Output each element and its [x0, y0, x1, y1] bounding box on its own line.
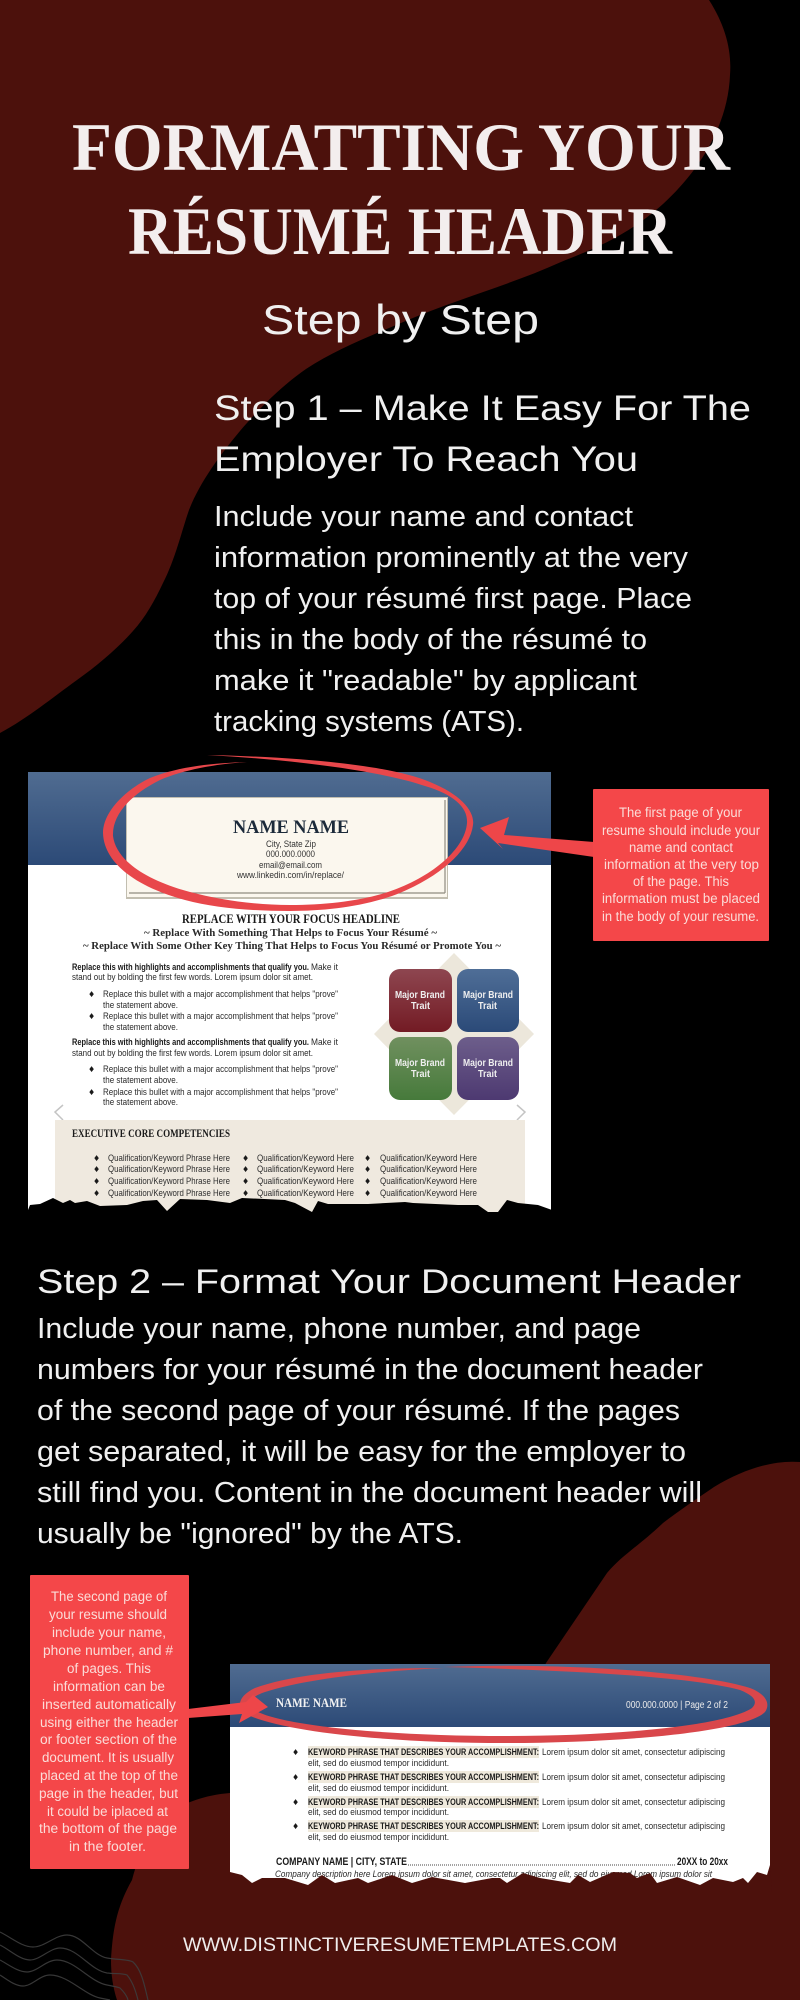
resume page 2 image: [228, 1664, 772, 1892]
blue header band: [28, 772, 551, 865]
core competencies panel: Qualification/Keyword Here: [257, 1164, 354, 1175]
core competencies panel: ♦: [93, 1165, 100, 1174]
core competencies panel: Qualification/Keyword Here: [380, 1164, 477, 1175]
core competencies panel: ♦: [242, 1189, 249, 1198]
page background: [230, 1664, 770, 1889]
torn paper edge: [228, 1865, 772, 1892]
callout 1: The first page of your: [619, 805, 742, 820]
step 2 body text: of the second page of your résumé. If the pages: [37, 1395, 680, 1427]
accomplishment bullets: KEYWORD PHRASE THAT DESCRIBES YOUR ACCOMPLISHMENT:: [308, 1797, 539, 1808]
callout 2: your resume should: [49, 1607, 167, 1622]
step 2 body text: get separated, it will be easy for the employer to: [37, 1436, 686, 1468]
subtitle: Step by Step: [262, 296, 539, 343]
step 1 heading: [214, 389, 751, 479]
accomplishment bullets: Lorem ipsum dolor sit amet, consectetur adipiscing: [542, 1747, 725, 1758]
step 1 body text: Include your name and contact: [214, 501, 633, 533]
name box: [126, 797, 448, 899]
core competencies panel: ♦: [93, 1189, 100, 1198]
accomplishment bullets: ♦: [292, 1798, 299, 1807]
highlights text: ♦: [88, 990, 95, 999]
callout 2: in the footer.: [69, 1839, 146, 1854]
step 1 heading: Employer To Reach You: [214, 440, 638, 479]
callout 2: include your name,: [52, 1625, 166, 1640]
callout 1: resume should include your: [602, 823, 760, 838]
accomplishment bullets: KEYWORD PHRASE THAT DESCRIBES YOUR ACCOMPLISHMENT:: [308, 1821, 539, 1832]
name box: www.linkedin.com/in/replace/: [236, 870, 344, 880]
accomplishment bullets: [292, 1746, 725, 1843]
callout 2: the bottom of the page: [39, 1821, 177, 1836]
top dark red shape: [0, 0, 730, 733]
accomplishment bullets: elit, sed do eiusmod tempor incididunt.: [308, 1758, 449, 1769]
title: FORMATTING YOUR: [72, 109, 731, 185]
core competencies panel: ♦: [364, 1177, 371, 1186]
brand trait diagram: [374, 953, 534, 1115]
focus headline: ~ Replace With Some Other Key Thing That Helps to Focus You Résumé or Promote You ~: [83, 940, 501, 952]
callout arrow 2: [188, 1695, 268, 1723]
focus headline: [83, 911, 501, 952]
highlights text: Replace this bullet with a major accomplishment that helps "prove": [103, 1087, 338, 1098]
core competencies panel: Qualification/Keyword Here: [257, 1176, 354, 1187]
decorative wavy lines: [0, 1932, 148, 2000]
step 1 body text: tracking systems (ATS).: [214, 706, 524, 738]
red ellipse highlighting name: [103, 755, 473, 911]
highlights text: the statement above.: [103, 1097, 178, 1108]
carousel chevrons: [55, 1105, 525, 1120]
highlights text: the statement above.: [103, 1075, 178, 1086]
core competencies panel: ♦: [93, 1177, 100, 1186]
callout 1: information at the very top: [604, 857, 759, 872]
callout 2: of pages. This: [67, 1661, 151, 1676]
callout 2: information can be: [53, 1679, 165, 1694]
header text: NAME NAME: [276, 1696, 347, 1710]
core competencies panel: ♦: [364, 1165, 371, 1174]
highlights text: the statement above.: [103, 1000, 178, 1011]
highlights text: Replace this bullet with a major accomplishment that helps "prove": [103, 1064, 338, 1075]
brand trait diagram: Trait: [478, 1000, 497, 1012]
core competencies panel: ♦: [242, 1154, 249, 1163]
callout 2: using either the header: [40, 1715, 178, 1730]
core competencies panel: Qualification/Keyword Here: [380, 1176, 477, 1187]
step 2 body text: usually be "ignored" by the ATS.: [37, 1518, 463, 1550]
core competencies panel: Qualification/Keyword Here: [380, 1153, 477, 1164]
step 2 body text: numbers for your résumé in the document header: [37, 1354, 703, 1386]
focus headline: REPLACE WITH YOUR FOCUS HEADLINE: [182, 911, 400, 926]
highlights text: Make it: [311, 1037, 338, 1048]
callout 2: phone number, and #: [43, 1643, 173, 1658]
brand trait diagram: Trait: [478, 1068, 497, 1080]
blue header band: [230, 1664, 770, 1727]
torn paper edge: [26, 1198, 553, 1220]
name box: City, State Zip: [266, 839, 316, 849]
title: RÉSUMÉ HEADER: [128, 193, 673, 269]
accomplishment bullets: Lorem ipsum dolor sit amet, consectetur adipiscing: [542, 1821, 725, 1832]
brand trait diagram: Trait: [411, 1068, 430, 1080]
accomplishment bullets: ♦: [292, 1748, 299, 1757]
core competencies panel: Qualification/Keyword Phrase Here: [108, 1188, 230, 1199]
highlights text: stand out by bolding the first few words. Lorem ipsum dolor sit amet.: [72, 1048, 313, 1059]
core competencies panel: EXECUTIVE CORE COMPETENCIES: [72, 1128, 230, 1140]
accomplishment bullets: KEYWORD PHRASE THAT DESCRIBES YOUR ACCOMPLISHMENT:: [308, 1747, 539, 1758]
callout 1: name and contact: [629, 840, 733, 855]
accomplishment bullets: KEYWORD PHRASE THAT DESCRIBES YOUR ACCOMPLISHMENT:: [308, 1772, 539, 1783]
core competencies panel: Qualification/Keyword Here: [380, 1188, 477, 1199]
focus headline: ~ Replace With Something That Helps to Focus Your Résumé ~: [144, 927, 437, 939]
core competencies panel: Qualification/Keyword Phrase Here: [108, 1153, 230, 1164]
accomplishment bullets: Lorem ipsum dolor sit amet, consectetur adipiscing: [542, 1797, 725, 1808]
core competencies panel: ♦: [364, 1154, 371, 1163]
step 1 body text: top of your résumé first page. Place: [214, 583, 692, 615]
accomplishment bullets: elit, sed do eiusmod tempor incididunt.: [308, 1783, 449, 1794]
brand trait diagram: Trait: [411, 1000, 430, 1012]
step 1 body text: information prominently at the very: [214, 542, 689, 574]
step 2 heading: Step 2 – Format Your Document Header: [37, 1263, 741, 1301]
callout 1: of the page. This: [633, 874, 729, 889]
core competencies panel: Qualification/Keyword Here: [257, 1188, 354, 1199]
callout arrow 1: [480, 817, 594, 857]
callout 1: in the body of your resume.: [602, 909, 759, 924]
callout 2: The second page of: [51, 1589, 167, 1604]
highlights text: Replace this bullet with a major accomplishment that helps "prove": [103, 1011, 338, 1022]
highlights text: Replace this with highlights and accomplishments that qualify you.: [72, 962, 309, 973]
step 1 body text: this in the body of the résumé to: [214, 624, 647, 656]
brand trait diagram: Major Brand: [463, 1057, 513, 1069]
core competencies panel: Qualification/Keyword Phrase Here: [108, 1176, 230, 1187]
brand trait diagram: Major Brand: [395, 989, 445, 1001]
step 1 body text: make it "readable" by applicant: [214, 665, 637, 697]
step 1 body text: [214, 501, 692, 738]
header text: 000.000.0000 | Page 2 of 2: [626, 1700, 728, 1711]
name box: 000.000.0000: [266, 849, 315, 859]
step 2 body text: [37, 1313, 703, 1550]
highlights text: Make it: [311, 962, 338, 973]
accomplishment bullets: ♦: [292, 1822, 299, 1831]
callout 2: [30, 1575, 189, 1869]
step 2 body text: still find you. Content in the document header will: [37, 1477, 702, 1509]
name box: NAME NAME: [233, 817, 349, 838]
callout 2: document. It is usually: [42, 1750, 174, 1765]
title: [72, 109, 731, 269]
red ellipse highlighting header: [240, 1666, 767, 1743]
accomplishment bullets: elit, sed do eiusmod tempor incididunt.: [308, 1807, 449, 1818]
core competencies panel: Qualification/Keyword Phrase Here: [108, 1164, 230, 1175]
brand trait diagram: Major Brand: [463, 989, 513, 1001]
accomplishment bullets: ♦: [292, 1773, 299, 1782]
step 2 body text: Include your name, phone number, and page: [37, 1313, 641, 1345]
callout 2: it could be iplaced at: [47, 1804, 168, 1819]
company line: 20XX to 20xx: [677, 1856, 729, 1868]
highlights text: ♦: [88, 1088, 95, 1097]
brand trait diagram: Major Brand: [395, 1057, 445, 1069]
accomplishment bullets: elit, sed do eiusmod tempor incididunt.: [308, 1832, 449, 1843]
highlights text: stand out by bolding the first few words. Lorem ipsum dolor sit amet.: [72, 972, 313, 983]
company line: Company description here Lorem ipsum dolor sit amet, consectetur adipiscing elit, sed do eiusmod Lorem ipsum dolor sit: [275, 1869, 712, 1880]
company line: [275, 1856, 729, 1880]
callout 1: information must be placed: [602, 891, 760, 906]
page background: [28, 772, 551, 1217]
callout 2: inserted automatically: [42, 1697, 176, 1712]
core competencies panel: ♦: [93, 1154, 100, 1163]
callout 2: or footer section of the: [40, 1732, 177, 1747]
core competencies panel: [55, 1120, 525, 1217]
step 1 heading: Step 1 – Make It Easy For The: [214, 389, 751, 428]
company line: COMPANY NAME | CITY, STATE: [276, 1856, 407, 1868]
core competencies panel: ♦: [364, 1189, 371, 1198]
core competencies panel: ♦: [242, 1177, 249, 1186]
accomplishment bullets: Lorem ipsum dolor sit amet, consectetur adipiscing: [542, 1772, 725, 1783]
callout 2: page in the header, but: [39, 1786, 178, 1801]
bottom dark red shape: [111, 1462, 800, 2000]
core competencies panel: ♦: [242, 1165, 249, 1174]
callout 1: [593, 789, 769, 941]
header text: [276, 1696, 728, 1711]
callout 2: placed at the top of the: [40, 1768, 178, 1783]
highlights text: Replace this with highlights and accomplishments that qualify you.: [72, 1037, 309, 1048]
footer website: WWW.DISTINCTIVERESUMETEMPLATES.COM: [183, 1934, 617, 1956]
name box: email@email.com: [259, 860, 322, 870]
highlights text: ♦: [88, 1065, 95, 1074]
highlights text: [72, 962, 338, 1108]
highlights text: the statement above.: [103, 1022, 178, 1033]
resume page 1 image: [26, 755, 553, 1220]
highlights text: ♦: [88, 1012, 95, 1021]
core competencies panel: Qualification/Keyword Here: [257, 1153, 354, 1164]
highlights text: Replace this bullet with a major accomplishment that helps "prove": [103, 989, 338, 1000]
